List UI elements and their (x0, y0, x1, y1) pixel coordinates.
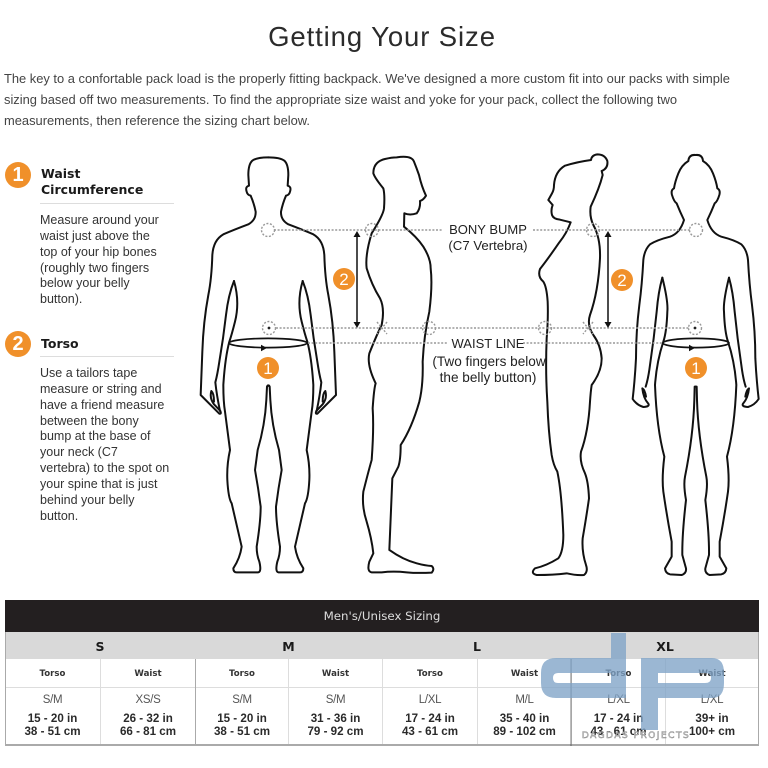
text: torso instructions: your spine that is just (40, 477, 157, 491)
badge: man 2 (333, 268, 355, 290)
arrow: woman torso length (604, 231, 612, 328)
intro paragraph (4, 71, 730, 128)
text: torso instructions: button. (40, 509, 78, 523)
L waist values: 35 - 40 in (500, 712, 549, 725)
heading: torso: Torso (41, 336, 79, 351)
table frame (5, 632, 759, 746)
label: waist line (432, 336, 546, 385)
L torso values: 17 - 24 in (405, 712, 455, 725)
icon: step 1 badge: 1 (12, 164, 24, 186)
badge: man 1 (257, 357, 279, 379)
M waist values: 31 - 36 in (311, 712, 360, 725)
S waist values (101, 688, 196, 746)
S torso label: Torso (40, 669, 65, 679)
text: torso instructions: bump at the base of (40, 429, 150, 443)
XL torso label (572, 659, 666, 688)
M torso values (196, 688, 289, 746)
S torso values: 15 - 20 in (28, 712, 77, 725)
M torso values: 15 - 20 in (217, 712, 267, 725)
XL waist label (666, 659, 759, 688)
waist loop: man (229, 338, 307, 351)
text: torso instructions: measure or string and (40, 382, 162, 396)
text: waist instructions: below your belly (40, 276, 130, 290)
heading: waist circumference: Circumference (41, 182, 143, 197)
text: torso instructions: Use a tailors tape (40, 366, 137, 380)
body measurement diagram (200, 153, 760, 576)
S torso values: S/M (43, 694, 62, 706)
size row background (5, 632, 759, 659)
XL waist label: Waist (698, 669, 726, 679)
icon: step 1 badge (5, 162, 31, 188)
badge: woman 2 (611, 269, 633, 291)
panel: waist circumference instructions (5, 162, 174, 306)
L torso values: 43 - 61 cm (402, 725, 458, 738)
figure: woman side (533, 154, 607, 575)
S waist values: XS/S (135, 694, 160, 706)
L torso label (383, 659, 478, 688)
XL waist values (666, 688, 759, 746)
L waist values (478, 688, 572, 746)
M waist values: S/M (326, 694, 345, 706)
label: waist line: WAIST LINE (452, 336, 525, 351)
badge: man 2: 2 (339, 270, 349, 289)
text: waist instructions: button). (40, 292, 82, 306)
L torso values: L/XL (419, 694, 441, 706)
text: torso instructions: behind your belly (40, 493, 135, 507)
label: waist line: the belly button) (440, 370, 536, 385)
S waist label: Waist (134, 669, 162, 679)
M waist values (289, 688, 383, 746)
text: waist instructions: Measure around your (40, 213, 159, 227)
badge: woman 2: 2 (617, 271, 627, 290)
M torso values: 38 - 51 cm (214, 725, 270, 738)
text: torso instructions: your neck (C7 (40, 445, 118, 459)
text: torso instructions: between the bony (40, 414, 139, 428)
badge: woman 1: 1 (691, 359, 701, 378)
label: waist line: (Two fingers below (432, 354, 546, 369)
M torso label: Torso (229, 669, 255, 679)
XL torso values: 17 - 24 in (594, 712, 643, 725)
figure: man side (363, 157, 433, 573)
XL torso values: L/XL (607, 694, 630, 706)
L waist label (478, 659, 572, 688)
XL torso values: 43 - 61 cm (590, 725, 647, 738)
intro paragraph: measurements, then reference the sizing chart below. (4, 113, 310, 128)
S torso label (5, 659, 101, 688)
arrow: man torso length (354, 231, 360, 328)
size: L: L (473, 639, 481, 654)
label: bony bump: (C7 Vertebra) (448, 238, 528, 253)
M waist label: Waist (322, 669, 349, 679)
M waist values: 79 - 92 cm (307, 725, 364, 738)
text: torso instructions (40, 366, 169, 523)
figure: woman front (633, 155, 759, 575)
size: S: S (95, 639, 104, 654)
badge: man 1: 1 (263, 359, 273, 378)
text: waist instructions: (roughly two fingers (40, 261, 149, 275)
XL waist values: 100+ cm (689, 725, 735, 738)
label: bony bump: BONY BUMP (449, 222, 527, 237)
L torso label: Torso (417, 669, 443, 679)
text: torso instructions: vertebra) to the spot on (40, 461, 169, 475)
M waist label (289, 659, 383, 688)
intro paragraph: sizing based off two measurements. To find the appropriate size waist and yoke for your pack, collect the following two (4, 92, 677, 107)
XL torso label: Torso (606, 669, 631, 679)
text: waist instructions (40, 213, 159, 306)
intro paragraph: The key to a confortable pack load is the properly fitting backpack. We've designed a more custom fit into our packs with simple (4, 71, 730, 86)
XL waist values: 39+ in (695, 712, 729, 725)
size: XL: XL (656, 639, 674, 654)
S torso values (5, 688, 101, 746)
XL waist values: L/XL (701, 694, 723, 706)
S waist label (101, 659, 196, 688)
text: torso instructions: have a friend measure (40, 398, 164, 412)
text: waist instructions: top of your hip bones (40, 245, 157, 259)
figure: man front (201, 157, 336, 572)
heading: waist circumference (41, 166, 143, 197)
L waist label: Waist (511, 669, 538, 679)
label: bony bump (448, 222, 528, 253)
M torso label (196, 659, 289, 688)
text: waist instructions: waist just above the (40, 229, 150, 243)
S waist values: 66 - 81 cm (120, 725, 176, 738)
L waist values: 89 - 102 cm (493, 725, 556, 738)
panel: torso instructions (5, 331, 174, 523)
watermark: dp logo: DAGDAS PROJECTS (582, 731, 690, 741)
navel marks (268, 327, 696, 329)
M torso values: S/M (232, 694, 252, 706)
separators between sizes (195, 659, 196, 746)
icon: step 2 badge: 2 (12, 333, 24, 355)
L torso values (383, 688, 478, 746)
icon: step 2 badge (5, 331, 31, 357)
S torso values: 38 - 51 cm (24, 725, 81, 738)
waist loop: woman (663, 338, 729, 351)
heading: waist circumference: Waist (41, 166, 80, 181)
table header: Men's/Unisex Sizing (324, 609, 440, 623)
S waist values: 26 - 32 in (123, 712, 173, 725)
title: Getting Your Size (268, 21, 496, 52)
size: M: M (282, 639, 295, 654)
L waist values: M/L (515, 694, 534, 706)
table header (5, 600, 759, 632)
XL torso values (572, 688, 666, 746)
badge: woman 1 (685, 357, 707, 379)
